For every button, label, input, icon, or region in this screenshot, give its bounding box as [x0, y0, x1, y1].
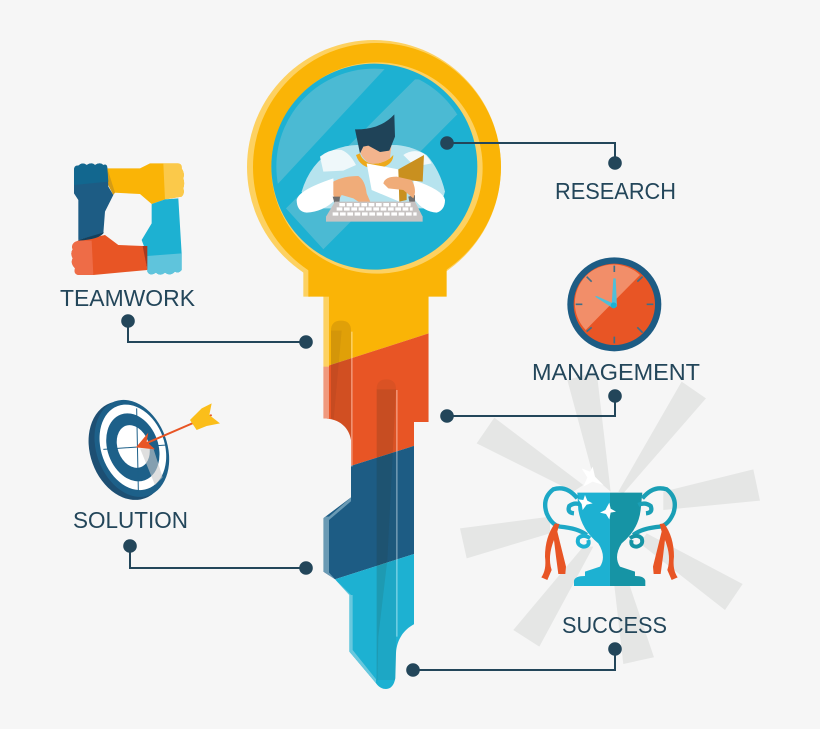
icon: target with arrow [75, 389, 220, 511]
person at keyboard [297, 114, 445, 222]
arrow [138, 415, 212, 447]
face [361, 143, 392, 164]
keyboard [326, 202, 423, 222]
stars [582, 467, 603, 487]
label: research: RESEARCH [555, 178, 676, 204]
label: success: SUCCESS [562, 612, 667, 638]
handles [545, 488, 587, 535]
highlight strips [323, 297, 329, 368]
hand left [333, 176, 372, 206]
sun rays behind trophy [460, 372, 760, 664]
shirt [302, 145, 445, 208]
cyan hand [142, 198, 182, 275]
cup [574, 493, 610, 586]
target [75, 389, 183, 511]
infographic [60, 40, 760, 689]
icon: trophy [541, 467, 678, 586]
sleeves [297, 178, 335, 213]
icon: teamwork hands [71, 163, 184, 275]
hair [355, 114, 395, 153]
book [398, 155, 424, 202]
label: solution: SOLUTION [73, 507, 188, 533]
label: teamwork: TEAMWORK [60, 285, 196, 311]
key blade [323, 296, 429, 689]
ribbons [541, 523, 566, 580]
red hand [71, 235, 147, 275]
ring and collar [247, 40, 501, 297]
label: management: MANAGEMENT [532, 359, 700, 385]
connector: solution [123, 539, 313, 575]
paper [367, 163, 399, 202]
connector: research [440, 136, 622, 170]
slot one [331, 321, 351, 443]
navy hand [74, 163, 113, 240]
icon: clock [567, 257, 661, 351]
yellow hand [107, 163, 184, 204]
connector: success [406, 642, 622, 677]
collar [356, 153, 393, 169]
connector: teamwork [121, 314, 313, 349]
key head [247, 40, 501, 297]
hand right [383, 177, 415, 198]
lens [270, 62, 483, 274]
coloured bands [323, 296, 429, 689]
slot two [377, 379, 396, 680]
connector: management [440, 389, 622, 423]
cuffs [333, 195, 415, 205]
